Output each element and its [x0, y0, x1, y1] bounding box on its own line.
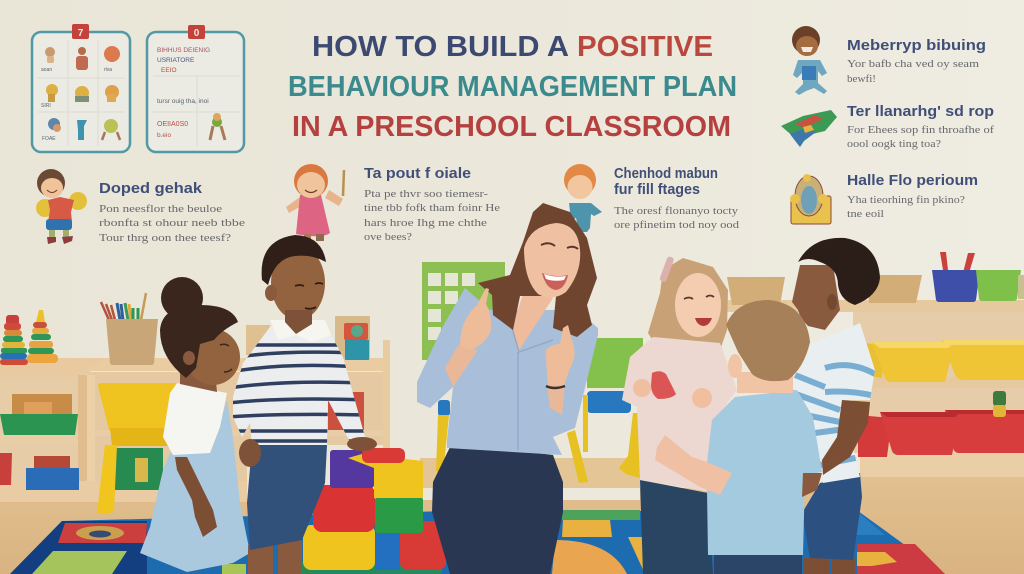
teacher second hand: [546, 325, 575, 385]
arm: [822, 400, 870, 475]
text block: Meberryp bibuing: bewfi!: [847, 73, 876, 85]
icon: child with pom-poms: [36, 169, 87, 244]
chair: yellow: [97, 383, 178, 513]
text block: Ta pout oiale: tine tbb fofk tham foinr He: [364, 202, 500, 214]
panel: chart card right: [147, 25, 244, 152]
toy: stacking ring tower red: [0, 315, 28, 365]
icon: running child: [792, 26, 827, 95]
teacher eyes and brows: [541, 243, 578, 249]
eye and mouth: [220, 344, 232, 372]
forearm and hand: [655, 435, 732, 495]
low shelf behind teacher: [420, 458, 640, 488]
text block: Ta pout oiale: Ta pout f oiale: [364, 166, 471, 182]
smile: [695, 318, 712, 326]
floor: [0, 477, 1024, 574]
teacher shirt placket: [512, 328, 553, 450]
panel: chart card right: USRIATORE: [157, 57, 195, 64]
face: [792, 265, 840, 330]
bin: green tray: [0, 394, 78, 435]
boy seen from behind: [655, 300, 822, 574]
text block: Ta pout oiale: Pta pe thvr soo tiemesr-: [364, 188, 488, 200]
text block: Ta pout oiale: ove bees?: [364, 231, 412, 243]
text block: Chenhod mabun: ore pfinetim tod noy ood: [614, 219, 740, 231]
legs: [803, 558, 855, 574]
striped shirt boy: [785, 238, 880, 574]
denim shorts: [802, 473, 862, 560]
eyes and mouth: [295, 283, 323, 309]
teacher neck: [512, 288, 553, 352]
girl in pink blouse: [622, 256, 737, 574]
text block: Doped gehak: rbonfta st ohour neeb tbbe: [99, 217, 245, 229]
title: [288, 31, 737, 143]
text block: Halle Flo perioum: Halle Flo perioum: [847, 173, 978, 189]
icon: boy in blue: [564, 164, 602, 232]
text block: Meberryp bibuing: [847, 38, 986, 85]
panel: chart card right: OEIIA0S0: [157, 121, 188, 128]
hair: [648, 258, 728, 350]
text block: Chenhod mabun: fur fill ftages: [614, 182, 700, 198]
panel: left shelves: [0, 293, 390, 513]
title: IN A PRESCHOOL CLASSROOM: [292, 111, 731, 143]
toy: camera block: [335, 316, 370, 360]
panel: chart card right: tursr ouig tha, inoi: [157, 98, 209, 105]
icon: play mat toy: [781, 110, 837, 147]
icons: chart card figures: [45, 46, 120, 140]
icon: girl with pointer: [286, 164, 344, 241]
panel: chart card left: rlva: [104, 67, 112, 73]
ear: [183, 351, 195, 365]
title: BEHAVIOUR MANAGEMENT PLAN: [288, 71, 737, 103]
face: [271, 246, 325, 320]
hair: [262, 235, 326, 285]
panel: chart card left: 7: [78, 28, 84, 39]
teacher raised hand: [460, 288, 491, 350]
hair: [160, 277, 238, 378]
white shirt: [163, 383, 227, 455]
panel: chart card left: aoan: [41, 67, 52, 73]
icon: golden bell frame: [790, 174, 831, 224]
ear: [827, 294, 837, 310]
blouse: [622, 337, 737, 492]
hair: [726, 300, 810, 381]
teacher smile: [542, 273, 568, 290]
teacher trousers: [432, 443, 563, 574]
text block: Ter llanarhg sd rop: [847, 104, 994, 150]
bin: blue: [26, 456, 79, 490]
text block: Doped gehak: Tour thrg oon thee teesf?: [99, 232, 231, 244]
head: [186, 329, 240, 385]
teacher right forearm: [547, 385, 565, 415]
panel: chart card left: [32, 24, 130, 152]
baskets: [727, 275, 922, 305]
panel: right shelves: [726, 252, 1024, 477]
teacher: [417, 203, 598, 574]
hair bow: [659, 256, 675, 283]
teacher hair: [478, 203, 597, 337]
building blocks: [300, 448, 446, 574]
neck: [285, 310, 312, 334]
striped boy: [225, 235, 370, 574]
text block: Doped gehak: Pon neesflor the beuloe: [99, 203, 222, 215]
panel: chart card right: b.eio: [157, 132, 171, 139]
shirt: [707, 390, 822, 555]
text block: Doped gehak: Doped gehak: [99, 181, 203, 197]
bin: red: [0, 453, 12, 485]
striped shirt: [793, 323, 875, 483]
rug: [10, 510, 945, 574]
ear: [265, 285, 277, 301]
bins: red: [858, 410, 1024, 457]
text block: Ta pout oiale: hars hroe Ihg me chthe: [364, 217, 487, 229]
hands of striped boy: [239, 437, 377, 467]
toy: pencil basket: [101, 293, 158, 365]
teacher shirt: [417, 288, 598, 455]
legs: [248, 538, 302, 574]
toy: red bin behind boy: [328, 392, 364, 430]
other forearm: [802, 473, 822, 497]
denim shorts: [247, 445, 327, 550]
basket: green: [976, 270, 1021, 301]
icon: tiny figure: [210, 113, 225, 140]
teacher left forearm: [445, 345, 478, 387]
teacher teeth: [544, 274, 566, 281]
text block: Ter llanarhg sd rop: Ter llanarhg' sd rop: [847, 104, 994, 120]
chair: green behind teacher: [567, 338, 643, 483]
basket: blue with toys: [932, 252, 980, 302]
text block: Ta pout oiale: [364, 166, 500, 243]
collar: [270, 320, 331, 342]
hands: [633, 379, 712, 408]
chair: left behind teacher: [436, 400, 450, 475]
dress: [140, 400, 250, 572]
teacher face: [524, 223, 580, 298]
girl in blue dress: [140, 277, 250, 572]
red toy: [651, 371, 676, 399]
bins: yellow: [867, 340, 1024, 382]
toy: small green figure: [993, 391, 1006, 417]
striped sweater: [233, 327, 365, 445]
face: [675, 273, 721, 337]
text block: Halle Flo perioum: [847, 173, 978, 220]
ear: [728, 354, 742, 378]
text block: Halle Flo perioum: Yha tieorhing fin pkino?: [847, 194, 965, 206]
text block: Meberryp bibuing: Meberryp bibuing: [847, 38, 986, 54]
text block: Ter llanarhg sd rop: oool oogk ting toa?: [847, 138, 941, 150]
neck: [737, 372, 793, 393]
panel: chart card right: BIHHUS DEIENIG: [157, 47, 210, 54]
text block: Ter llanarhg sd rop: For Ehees sop fin throafhe of: [847, 124, 994, 136]
text block: Halle Flo perioum: tne eoil: [847, 208, 884, 220]
jeans: [714, 555, 802, 574]
toy: stacking ring tower yellow: [27, 310, 58, 363]
text block: Chenhod mabun: The oresf flonanyo tocty: [614, 205, 739, 217]
hair: [798, 238, 880, 305]
text block: Chenhod mabun: [614, 166, 740, 231]
panel: chart card left: FOAE: [42, 136, 56, 142]
panel: chart card left: SIRI: [41, 103, 51, 109]
bin: green crate: [115, 448, 163, 490]
panel: chart card right: 0: [194, 28, 200, 39]
jeans: [640, 480, 713, 574]
toy: cream block behind boy: [246, 325, 270, 355]
title: POSITIVE: [577, 31, 713, 63]
text block: Chenhod mabun: Chenhod mabun: [614, 166, 718, 182]
eyes: [684, 296, 714, 299]
text block: Doped gehak: [99, 181, 245, 244]
neck: [180, 372, 217, 392]
chart: green wall calendar: [422, 262, 505, 360]
title: HOW TO BUILD A: [312, 31, 569, 63]
arm: [175, 457, 217, 537]
teacher bracelet: [546, 386, 565, 388]
text block: Meberryp bibuing: Yor bafb cha ved oy seam: [847, 58, 979, 70]
panel: chart card right: EEIO: [161, 67, 177, 74]
